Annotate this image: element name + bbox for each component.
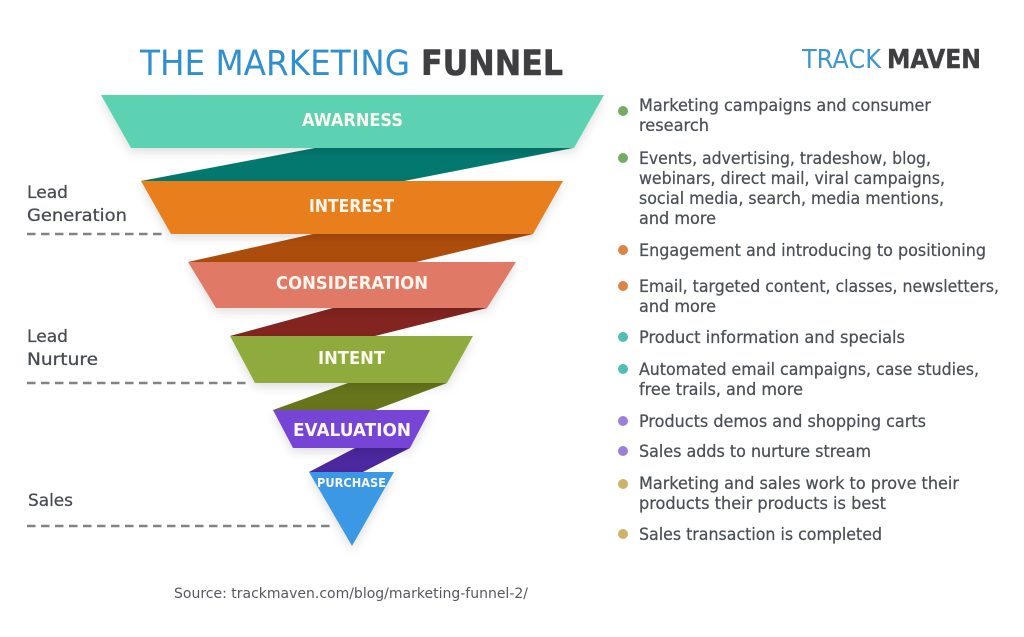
item: events: and more [639,209,716,228]
stage: interest [141,181,563,234]
item: automated email: free trails, and more [639,380,803,399]
band: teal fold [141,148,573,181]
item: sales transaction: Sales transaction is completed [639,525,882,544]
item: automated email [618,360,979,399]
label: lead nurture [27,327,250,383]
stage: purchase [309,472,394,546]
label: lead generation: Generation [27,206,127,225]
funnel [101,95,604,546]
title: THE MARKETING [139,44,410,84]
logo: Track Maven: MAVEN [887,45,981,75]
item: marketing campaigns: research [639,116,709,135]
item: events: webinars, direct mail, viral campaigns, [639,169,945,188]
item: email [618,277,999,316]
stage: consideration: CONSIDERATION [276,273,428,294]
stage: awareness: AWARNESS [302,110,403,131]
stage: interest: INTEREST [309,196,395,217]
item: events [618,149,945,228]
title [139,44,563,84]
band: purple fold [309,448,410,472]
item: marketing campaigns: Marketing campaigns and consumer [639,96,931,115]
item: sales nurture: Sales adds to nurture stream [639,442,871,461]
item: events: Events, advertising, tradeshow, blog, [639,149,931,168]
stage: consideration [188,262,516,308]
item: automated email: Automated email campaigns, case studies, [639,360,979,379]
stage: evaluation: EVALUATION [293,420,411,441]
stage: awareness [101,95,604,148]
label: lead generation: Lead [27,183,68,202]
item: email: and more [639,297,716,316]
item: engagement: Engagement and introducing to positioning [639,241,986,260]
item: marketing and sales: products their products is best [639,494,887,513]
item: email: Email, targeted content, classes, newsletters, [639,277,999,296]
item: events: social media, search, media mentions, [639,189,944,208]
item: marketing and sales [618,474,959,513]
item: product information: Product information and specials [639,328,905,347]
label: lead generation [27,183,163,234]
label: lead nurture: Nurture [27,350,98,369]
logo: Track Maven: TRACK [801,45,882,75]
band: red fold [230,308,487,336]
item: marketing campaigns [618,96,931,135]
item: marketing and sales: Marketing and sales work to prove their [639,474,959,493]
item: product demos: Products demos and shopping carts [639,412,926,431]
stage: intent: INTENT [318,348,386,369]
stage: intent [230,336,473,383]
title: FUNNEL [421,44,563,84]
label: lead nurture: Lead [27,327,68,346]
source note: Source: trackmaven.com/blog/marketing-funnel-2/ [174,586,528,602]
label: sales: Sales [28,491,73,510]
band: orange fold [188,234,533,262]
band: olive fold [273,383,447,410]
stage: purchase: PURCHASE [317,475,386,490]
list: funnel activities [618,96,999,544]
logo: Track Maven [801,45,981,75]
stage: evaluation [273,410,430,448]
